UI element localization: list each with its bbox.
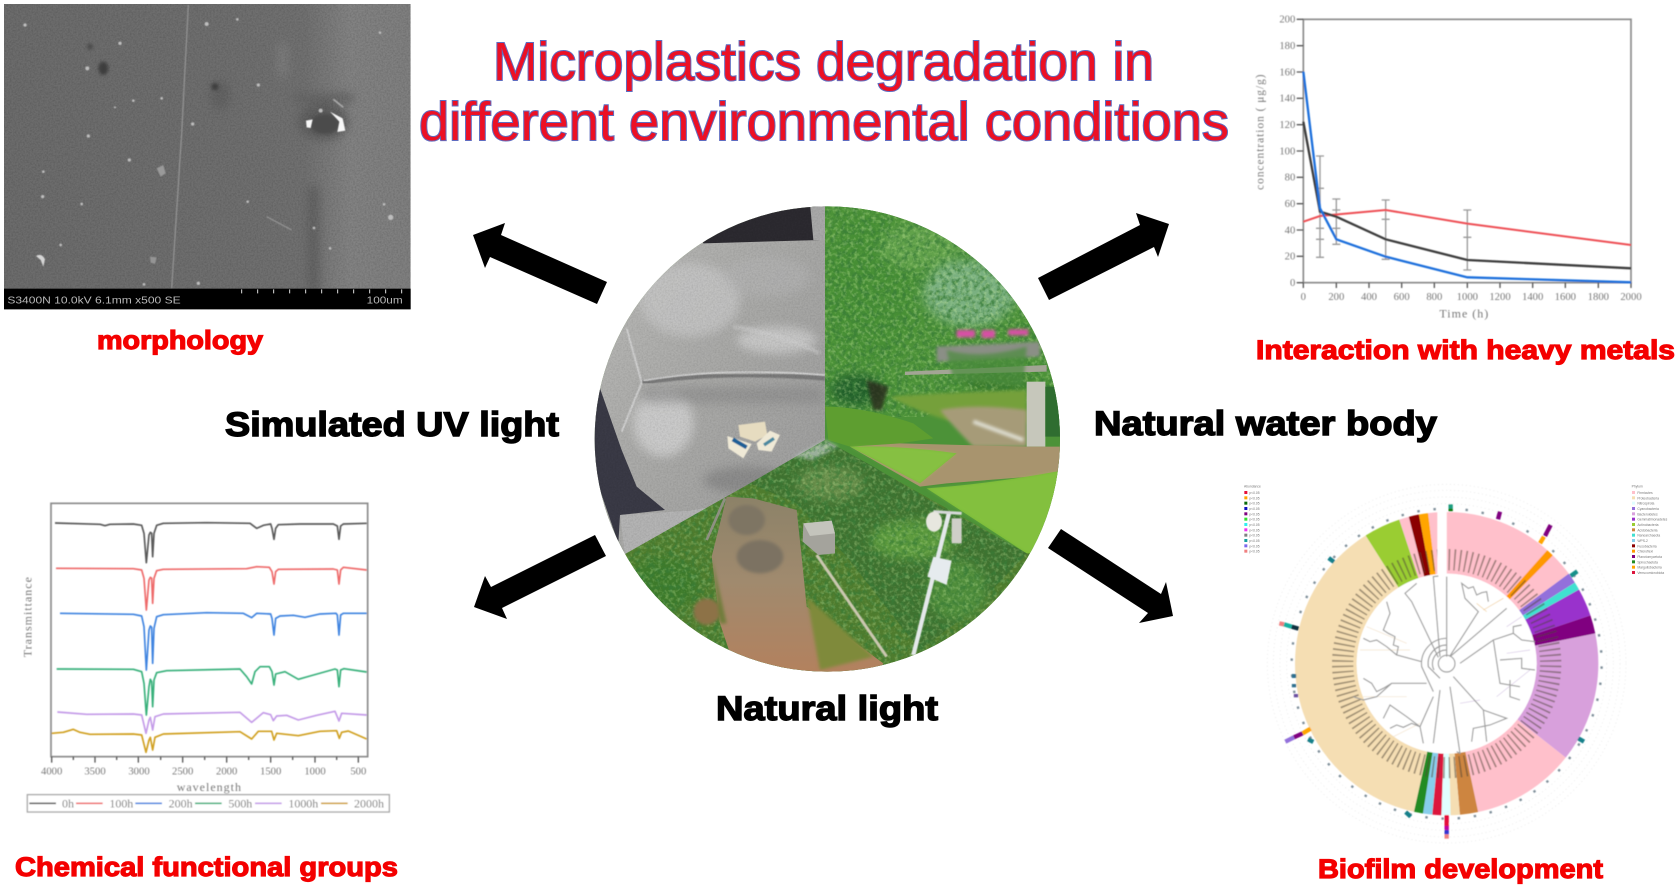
legend: phylum: Acidobacteria (1637, 528, 1658, 532)
title: Microplastics degradation in (493, 32, 1154, 92)
chart legend: 0h (62, 796, 74, 810)
chart: concentration over time, interaction with heavy metals: 2000 (1620, 292, 1642, 303)
legend: abundance: p<0.05 (1249, 512, 1260, 516)
label: biofilm development: Biofilm development (1318, 854, 1603, 884)
inner white tree disc (1357, 574, 1537, 754)
chart: FTIR transmittance spectra: 1500 (260, 766, 281, 777)
legend: abundance: p<0.05 (1249, 544, 1260, 548)
panel: SEM micrograph morphology: 100um (367, 296, 403, 307)
legend: abundance: p<0.05 (1249, 523, 1260, 527)
chart: concentration over time, interaction with heavy metals: 40 (1285, 225, 1295, 236)
arrow: down-right to biofilm development (1048, 529, 1173, 623)
title: different environmental conditions (419, 92, 1229, 152)
legend: abundance: p<0.05 (1249, 507, 1260, 511)
legend: phylum: Margulisbacteria (1637, 566, 1662, 570)
legend: phylum: Nanoarchaeota (1637, 534, 1660, 538)
chart: concentration over time, interaction with heavy metals: 0 (1301, 292, 1306, 303)
legend: phylum: Fusobacteria (1637, 544, 1657, 548)
chart: concentration over time, interaction with heavy metals: 1000 (1457, 292, 1478, 303)
legend: abundance: p<0.05 (1249, 502, 1260, 506)
arrow: up-left to morphology (473, 223, 607, 304)
panel: central photo circle of three exposure conditions (580, 190, 1073, 683)
chart: concentration over time, interaction with heavy metals: 200 (1328, 292, 1344, 303)
arrow: down-left to chemical functional groups (474, 535, 606, 619)
title (419, 32, 1229, 152)
chart: FTIR transmittance spectra: 3000 (128, 766, 150, 777)
legend: abundance: Abundance (1244, 485, 1261, 489)
chart legend: 1000h (288, 796, 318, 810)
chart legend (27, 795, 389, 812)
label: interaction with heavy metals: Interaction with heavy metals (1256, 335, 1675, 365)
chart: concentration over time, interaction with heavy metals: Time (h) (1439, 306, 1489, 320)
chart: concentration over time, interaction with heavy metals: 400 (1361, 292, 1377, 303)
chart legend: 2000h (354, 796, 384, 810)
chart: concentration over time, interaction with heavy metals: 80 (1285, 173, 1295, 184)
chart: FTIR transmittance spectra (21, 503, 389, 812)
panel: SEM micrograph morphology (4, 4, 411, 309)
rings (1267, 484, 1626, 843)
legend: phylum: Planctomycetota (1637, 555, 1662, 559)
chart: FTIR transmittance spectra: 2500 (172, 766, 193, 777)
chart: concentration over time, interaction with heavy metals: 100 (1279, 146, 1295, 157)
chart: concentration over time, interaction with heavy metals: 180 (1279, 41, 1295, 52)
tree branches (1353, 576, 1535, 753)
chart: FTIR transmittance spectra: 1000 (304, 766, 326, 777)
label: natural water body: Natural water body (1094, 405, 1437, 443)
label: simulated UV light: Simulated UV light (225, 406, 559, 444)
legend: phylum: Verrucomicrobiota (1637, 571, 1664, 575)
outer abundance marks (1292, 509, 1602, 819)
legend: abundance: p<0.05 (1249, 491, 1260, 495)
legend: phylum: Nitrospirota (1637, 502, 1654, 506)
legend: abundance: p<0.05 (1249, 539, 1260, 543)
legend: abundance: p<0.05 (1249, 550, 1260, 554)
taxon name ticks (1343, 560, 1551, 768)
chart legend: 100h (109, 796, 133, 810)
legend: phylum: Cyanobacteria (1637, 507, 1659, 511)
chart: concentration over time, interaction with heavy metals: 1400 (1522, 292, 1543, 303)
legend: abundance: p<0.05 (1249, 534, 1260, 538)
photo: simulated UV light chamber (580, 190, 825, 590)
legend: abundance: p<0.05 (1249, 528, 1260, 532)
chart: FTIR transmittance spectra: 4000 (41, 766, 62, 777)
label: natural light: Natural light (716, 690, 938, 728)
legend: phylum (1632, 485, 1668, 575)
legend: phylum: Phylum (1632, 485, 1643, 489)
chart: concentration over time, interaction with heavy metals (1254, 15, 1642, 320)
legend: abundance: p<0.05 (1249, 518, 1260, 522)
chart: FTIR transmittance spectra: 500 (350, 766, 366, 777)
legend: phylum: Firmicutes (1637, 491, 1653, 495)
chart: concentration over time, interaction with heavy metals: 800 (1426, 292, 1442, 303)
legend: phylum: Spirochaetota (1637, 560, 1658, 564)
chart: concentration over time, interaction with heavy metals: concentration ( μg/g) (1254, 73, 1266, 190)
legend: phylum: WPS-2 (1637, 539, 1648, 543)
label: morphology: morphology (97, 325, 264, 355)
photo: natural light outdoor rack (625, 438, 1030, 672)
chart: concentration over time, interaction with heavy metals: 0 (1290, 278, 1295, 289)
chart: FTIR transmittance spectra: wavelength (177, 780, 242, 794)
chart: circular phylogenetic tree, biofilm development (1244, 484, 1668, 843)
chart: FTIR transmittance spectra: 2000 (216, 766, 237, 777)
chart: concentration over time, interaction with heavy metals: 60 (1285, 199, 1295, 210)
chart: concentration over time, interaction with heavy metals: 1200 (1489, 292, 1511, 303)
icon: weather sensor pole (913, 512, 962, 655)
legend: phylum: Actinobacteria (1637, 523, 1659, 527)
chart: concentration over time, interaction with heavy metals: 600 (1394, 292, 1410, 303)
chart: concentration over time, interaction with heavy metals: 120 (1279, 120, 1295, 131)
label: chemical functional groups: Chemical functional groups (15, 852, 398, 882)
panel: SEM micrograph morphology: S3400N 10.0kV 6.1mm x500 SE (7, 296, 181, 307)
chart: concentration over time, interaction with heavy metals: 160 (1279, 67, 1295, 78)
legend: phylum: Bacteroidetes (1637, 512, 1658, 516)
legend: abundance (1244, 485, 1261, 554)
arrow: up-right to heavy metals (1038, 213, 1169, 300)
legend: phylum: Chloroflexi (1637, 550, 1653, 554)
legend: abundance: p<0.05 (1249, 496, 1260, 500)
icon: sample boxes (727, 422, 780, 458)
chart: concentration over time, interaction with heavy metals: 20 (1285, 252, 1295, 263)
chart: concentration over time, interaction with heavy metals: 1600 (1555, 292, 1576, 303)
chart: concentration over time, interaction with heavy metals: 1800 (1588, 292, 1609, 303)
chart legend: 200h (169, 796, 193, 810)
tree coloured twigs (1360, 598, 1530, 737)
photo: natural water body (825, 203, 1073, 560)
outlier abundance stacks (1279, 504, 1584, 839)
chart: FTIR transmittance spectra: 3500 (84, 766, 106, 777)
chart legend: 500h (228, 796, 252, 810)
phylum sectors (1292, 509, 1602, 819)
chart: concentration over time, interaction with heavy metals: 200 (1279, 15, 1295, 26)
chart: FTIR transmittance spectra: Transmittance (21, 576, 35, 657)
chart: concentration over time, interaction with heavy metals: 140 (1279, 94, 1295, 105)
legend: phylum: Gemmatimonadetes (1637, 518, 1668, 522)
legend: phylum: Proteobacteria (1637, 496, 1659, 500)
